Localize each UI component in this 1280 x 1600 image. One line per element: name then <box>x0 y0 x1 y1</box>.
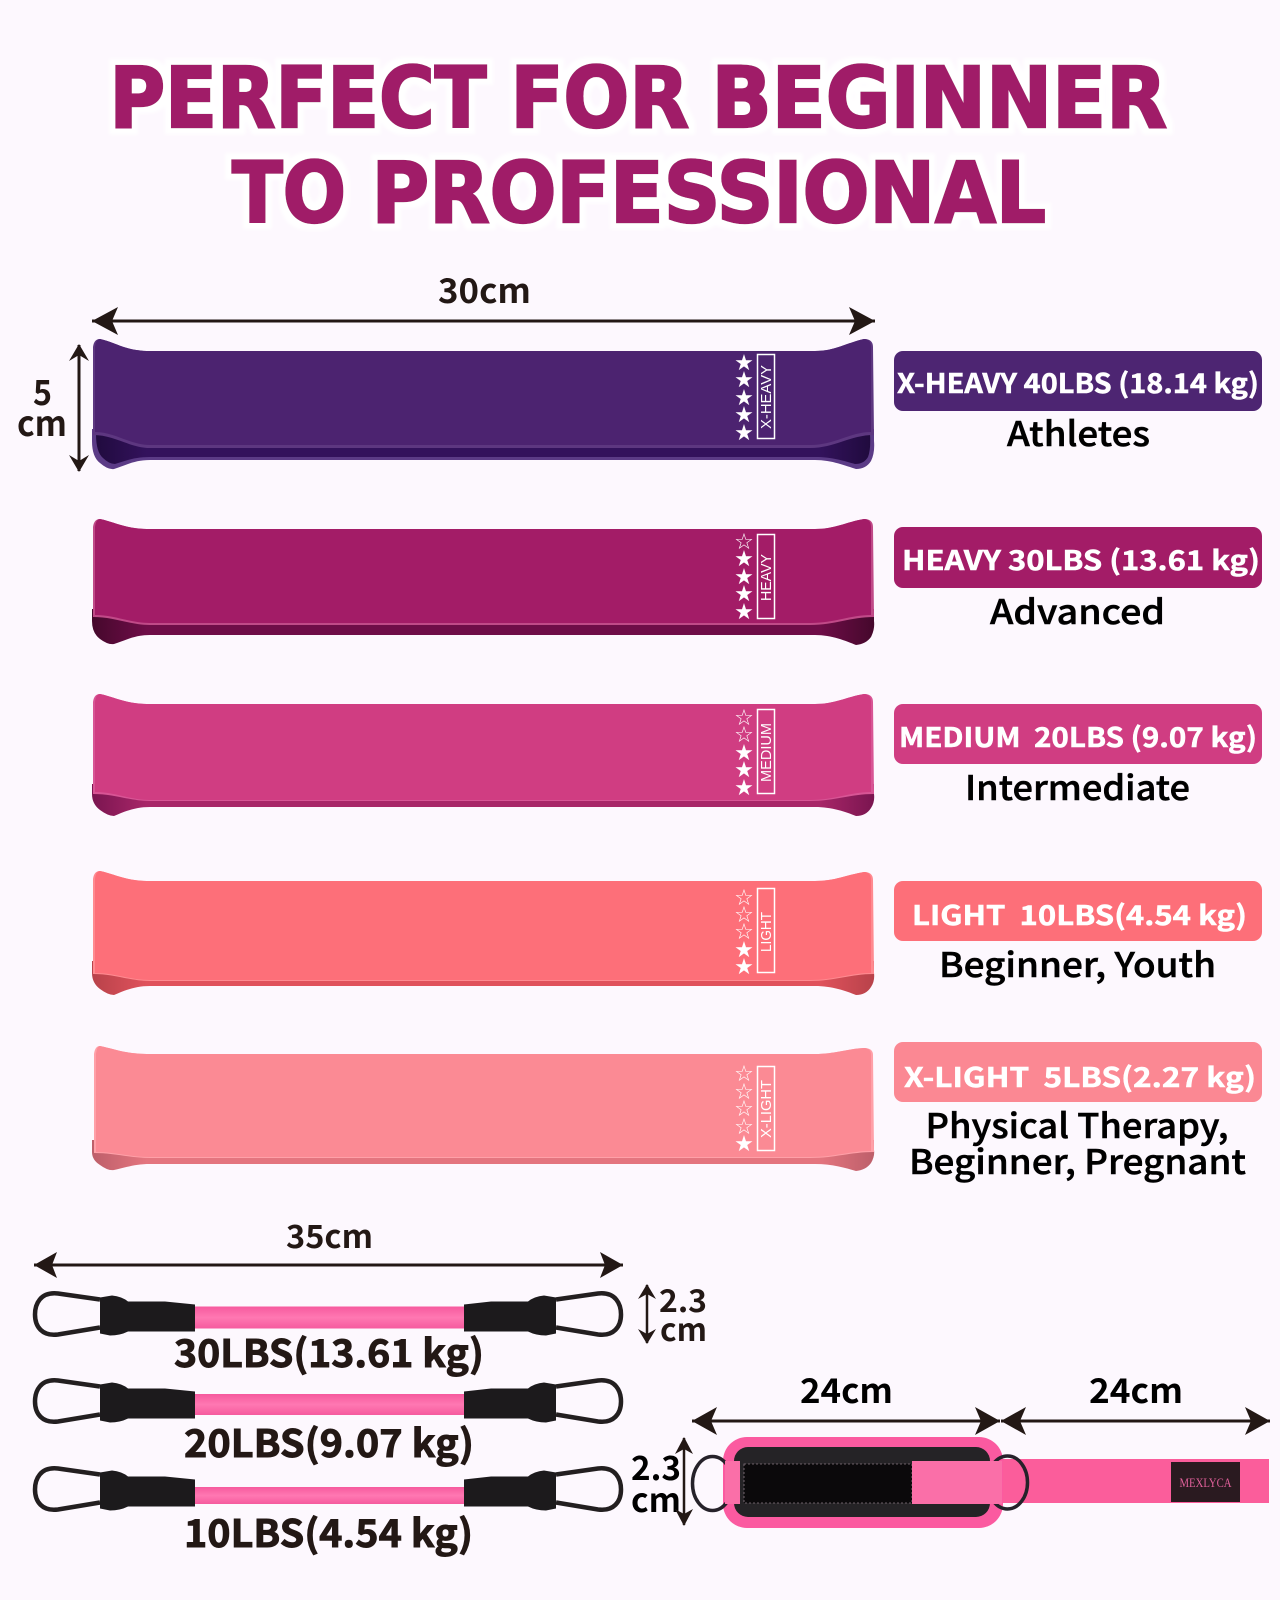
band: light coral <box>92 871 874 995</box>
dimension: strap 24cm <box>1001 1364 1270 1435</box>
dimension: tube thickness 2.3 cm <box>638 1276 707 1350</box>
band 2 marks: stars and HEAVY label: ★ <box>734 565 754 590</box>
dimension: strap 24cm: 24cm <box>1089 1364 1183 1413</box>
tube label: 30 lbs: 30LBS(13.61 kg) <box>174 1323 484 1378</box>
dimension: cuff width 2.3 cm: 2.3 <box>631 1442 681 1490</box>
title: BEGINNER <box>712 49 1167 147</box>
band 3 marks: stars and MEDIUM label: ★ <box>734 741 754 766</box>
band 5 marks: stars and X-LIGHT label: ☆ <box>734 1080 754 1105</box>
label: x-heavy <box>894 351 1262 456</box>
band 5 marks: stars and X-LIGHT label: X-LIGHT <box>758 1080 775 1138</box>
band: x-light salmon <box>92 1046 874 1171</box>
dimension: tube thickness 2.3 cm: 2.3 <box>659 1276 707 1321</box>
band 3 marks: stars and MEDIUM label: ★ <box>734 776 754 801</box>
dimension: tube length 35cm <box>34 1212 623 1278</box>
dimension: band width 5 cm: cm <box>17 396 67 447</box>
band 5 marks: stars and X-LIGHT label: ☆ <box>734 1115 754 1140</box>
label: heavy: HEAVY 30LBS (13.61 kg) <box>902 539 1260 578</box>
label: medium <box>894 704 1262 810</box>
band 4 marks: stars and LIGHT label <box>734 886 775 980</box>
title: FOR <box>510 49 689 147</box>
band 2 marks: stars and HEAVY label: ★ <box>734 600 754 625</box>
band 1 marks: stars and X-HEAVY label: ★ <box>734 368 754 393</box>
label: medium: MEDIUM 20LBS (9.07 kg) <box>899 716 1257 755</box>
tube: 20 lbs <box>35 1380 621 1422</box>
title: PROFESSIONAL <box>372 144 1046 242</box>
band 5 marks: stars and X-LIGHT label: ★ <box>734 1132 754 1157</box>
dimension: band length 30cm: 30cm <box>438 264 531 313</box>
band 2 marks: stars and HEAVY label: ★ <box>734 582 754 607</box>
band 1 marks: stars and X-HEAVY label: ★ <box>734 421 754 446</box>
title: TO <box>232 144 346 242</box>
band 4 marks: stars and LIGHT label: ☆ <box>734 920 754 945</box>
tube: 10 lbs <box>35 1468 621 1510</box>
dimension: band width 5 cm: 5 <box>33 365 52 416</box>
band: x-heavy purple <box>92 339 874 469</box>
band: heavy magenta <box>92 519 874 645</box>
label: light: LIGHT 10LBS(4.54 kg) <box>912 894 1247 933</box>
band 3 marks: stars and MEDIUM label <box>734 706 775 801</box>
band 1 marks: stars and X-HEAVY label: X-HEAVY <box>758 365 775 429</box>
label: light <box>894 881 1262 987</box>
title <box>110 49 1167 242</box>
label: x-light <box>894 1042 1262 1184</box>
band 2 marks: stars and HEAVY label: HEAVY <box>758 554 775 601</box>
label: medium: Intermediate <box>965 761 1190 810</box>
band 2 marks: stars and HEAVY label <box>734 530 775 625</box>
label: light: Beginner, Youth <box>939 938 1216 987</box>
band 5 marks: stars and X-LIGHT label <box>734 1062 775 1157</box>
label: heavy <box>894 527 1262 634</box>
band 2 marks: stars and HEAVY label: ☆ <box>734 530 754 555</box>
ankle strap: cuff <box>692 1437 1028 1528</box>
dimension: band width 5 cm <box>17 344 89 472</box>
tube label: 10 lbs: 10LBS(4.54 kg) <box>184 1503 473 1558</box>
band 1 marks: stars and X-HEAVY label: ★ <box>734 386 754 411</box>
ankle strap: extension strap with label: MEXLYCA <box>1180 1476 1232 1490</box>
dimension: band length 30cm <box>92 264 875 335</box>
band 2 marks: stars and HEAVY label: ★ <box>734 547 754 572</box>
tube: 30 lbs <box>35 1293 621 1336</box>
band 4 marks: stars and LIGHT label: ★ <box>734 938 754 963</box>
band 5 marks: stars and X-LIGHT label: ☆ <box>734 1062 754 1087</box>
dimension: cuff 24cm: 24cm <box>800 1364 893 1413</box>
band 3 marks: stars and MEDIUM label: ☆ <box>734 706 754 731</box>
dimension: cuff 24cm <box>692 1364 1000 1435</box>
label: x-light: Physical Therapy, <box>926 1099 1228 1148</box>
band 1 marks: stars and X-HEAVY label: ★ <box>734 351 754 376</box>
band 4 marks: stars and LIGHT label: LIGHT <box>758 912 775 952</box>
band 3 marks: stars and MEDIUM label: ★ <box>734 758 754 783</box>
band 1 marks: stars and X-HEAVY label <box>734 351 775 446</box>
label: x-heavy: Athletes <box>1007 407 1150 456</box>
band 1 marks: stars and X-HEAVY label: ★ <box>734 403 754 428</box>
label: heavy: Advanced <box>990 585 1165 634</box>
label: x-light: Beginner, Pregnant <box>909 1135 1246 1184</box>
band 3 marks: stars and MEDIUM label: MEDIUM <box>758 723 775 782</box>
title: PERFECT <box>110 49 486 147</box>
ankle strap: extension strap with label <box>985 1459 1269 1503</box>
label: x-light: X-LIGHT 5LBS(2.27 kg) <box>904 1056 1256 1095</box>
band 5 marks: stars and X-LIGHT label: ☆ <box>734 1097 754 1122</box>
band 4 marks: stars and LIGHT label: ☆ <box>734 903 754 928</box>
band: medium pink <box>92 694 874 816</box>
band 4 marks: stars and LIGHT label: ★ <box>734 955 754 980</box>
tube label: 20 lbs: 20LBS(9.07 kg) <box>184 1413 474 1468</box>
band 4 marks: stars and LIGHT label: ☆ <box>734 886 754 911</box>
dimension: tube thickness 2.3 cm: cm <box>660 1305 707 1350</box>
dimension: tube length 35cm: 35cm <box>286 1212 373 1258</box>
label: x-heavy: X-HEAVY 40LBS (18.14 kg) <box>897 362 1259 401</box>
dimension: cuff width 2.3 cm <box>631 1437 693 1526</box>
dimension: cuff width 2.3 cm: cm <box>631 1474 681 1522</box>
band 3 marks: stars and MEDIUM label: ☆ <box>734 723 754 748</box>
